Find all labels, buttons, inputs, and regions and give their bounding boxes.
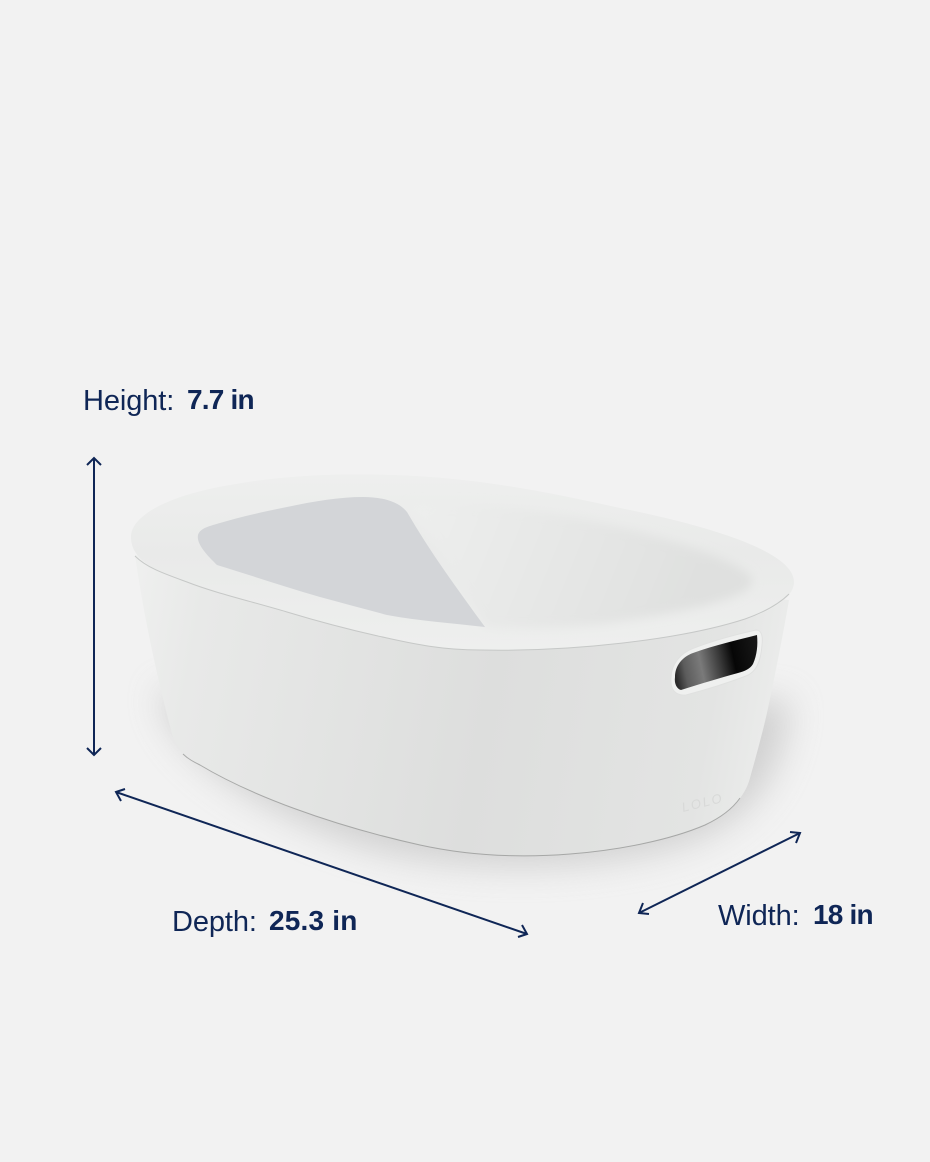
side handle (671, 630, 762, 695)
tub body (135, 555, 789, 856)
label: height: Height: (83, 385, 174, 417)
label: depth: 25.3 in (269, 905, 358, 936)
tub rim (131, 474, 794, 650)
tub interior (410, 504, 752, 628)
logo mark: LOLO (680, 790, 725, 815)
arrow: width (639, 832, 800, 914)
gray seat pad (198, 497, 485, 627)
tub shadow (160, 690, 790, 866)
label: height (83, 384, 254, 417)
label: width (718, 899, 873, 932)
label: depth: Depth: (172, 906, 257, 938)
label: width: 18 in (813, 899, 873, 930)
label: depth (172, 905, 358, 938)
label: width: Width: (718, 900, 800, 932)
arrow: depth (116, 789, 527, 937)
rim seam (135, 556, 789, 650)
arrow: height (87, 458, 101, 755)
tub bottom edge (183, 754, 740, 856)
label: height: 7.7 in (187, 384, 254, 415)
